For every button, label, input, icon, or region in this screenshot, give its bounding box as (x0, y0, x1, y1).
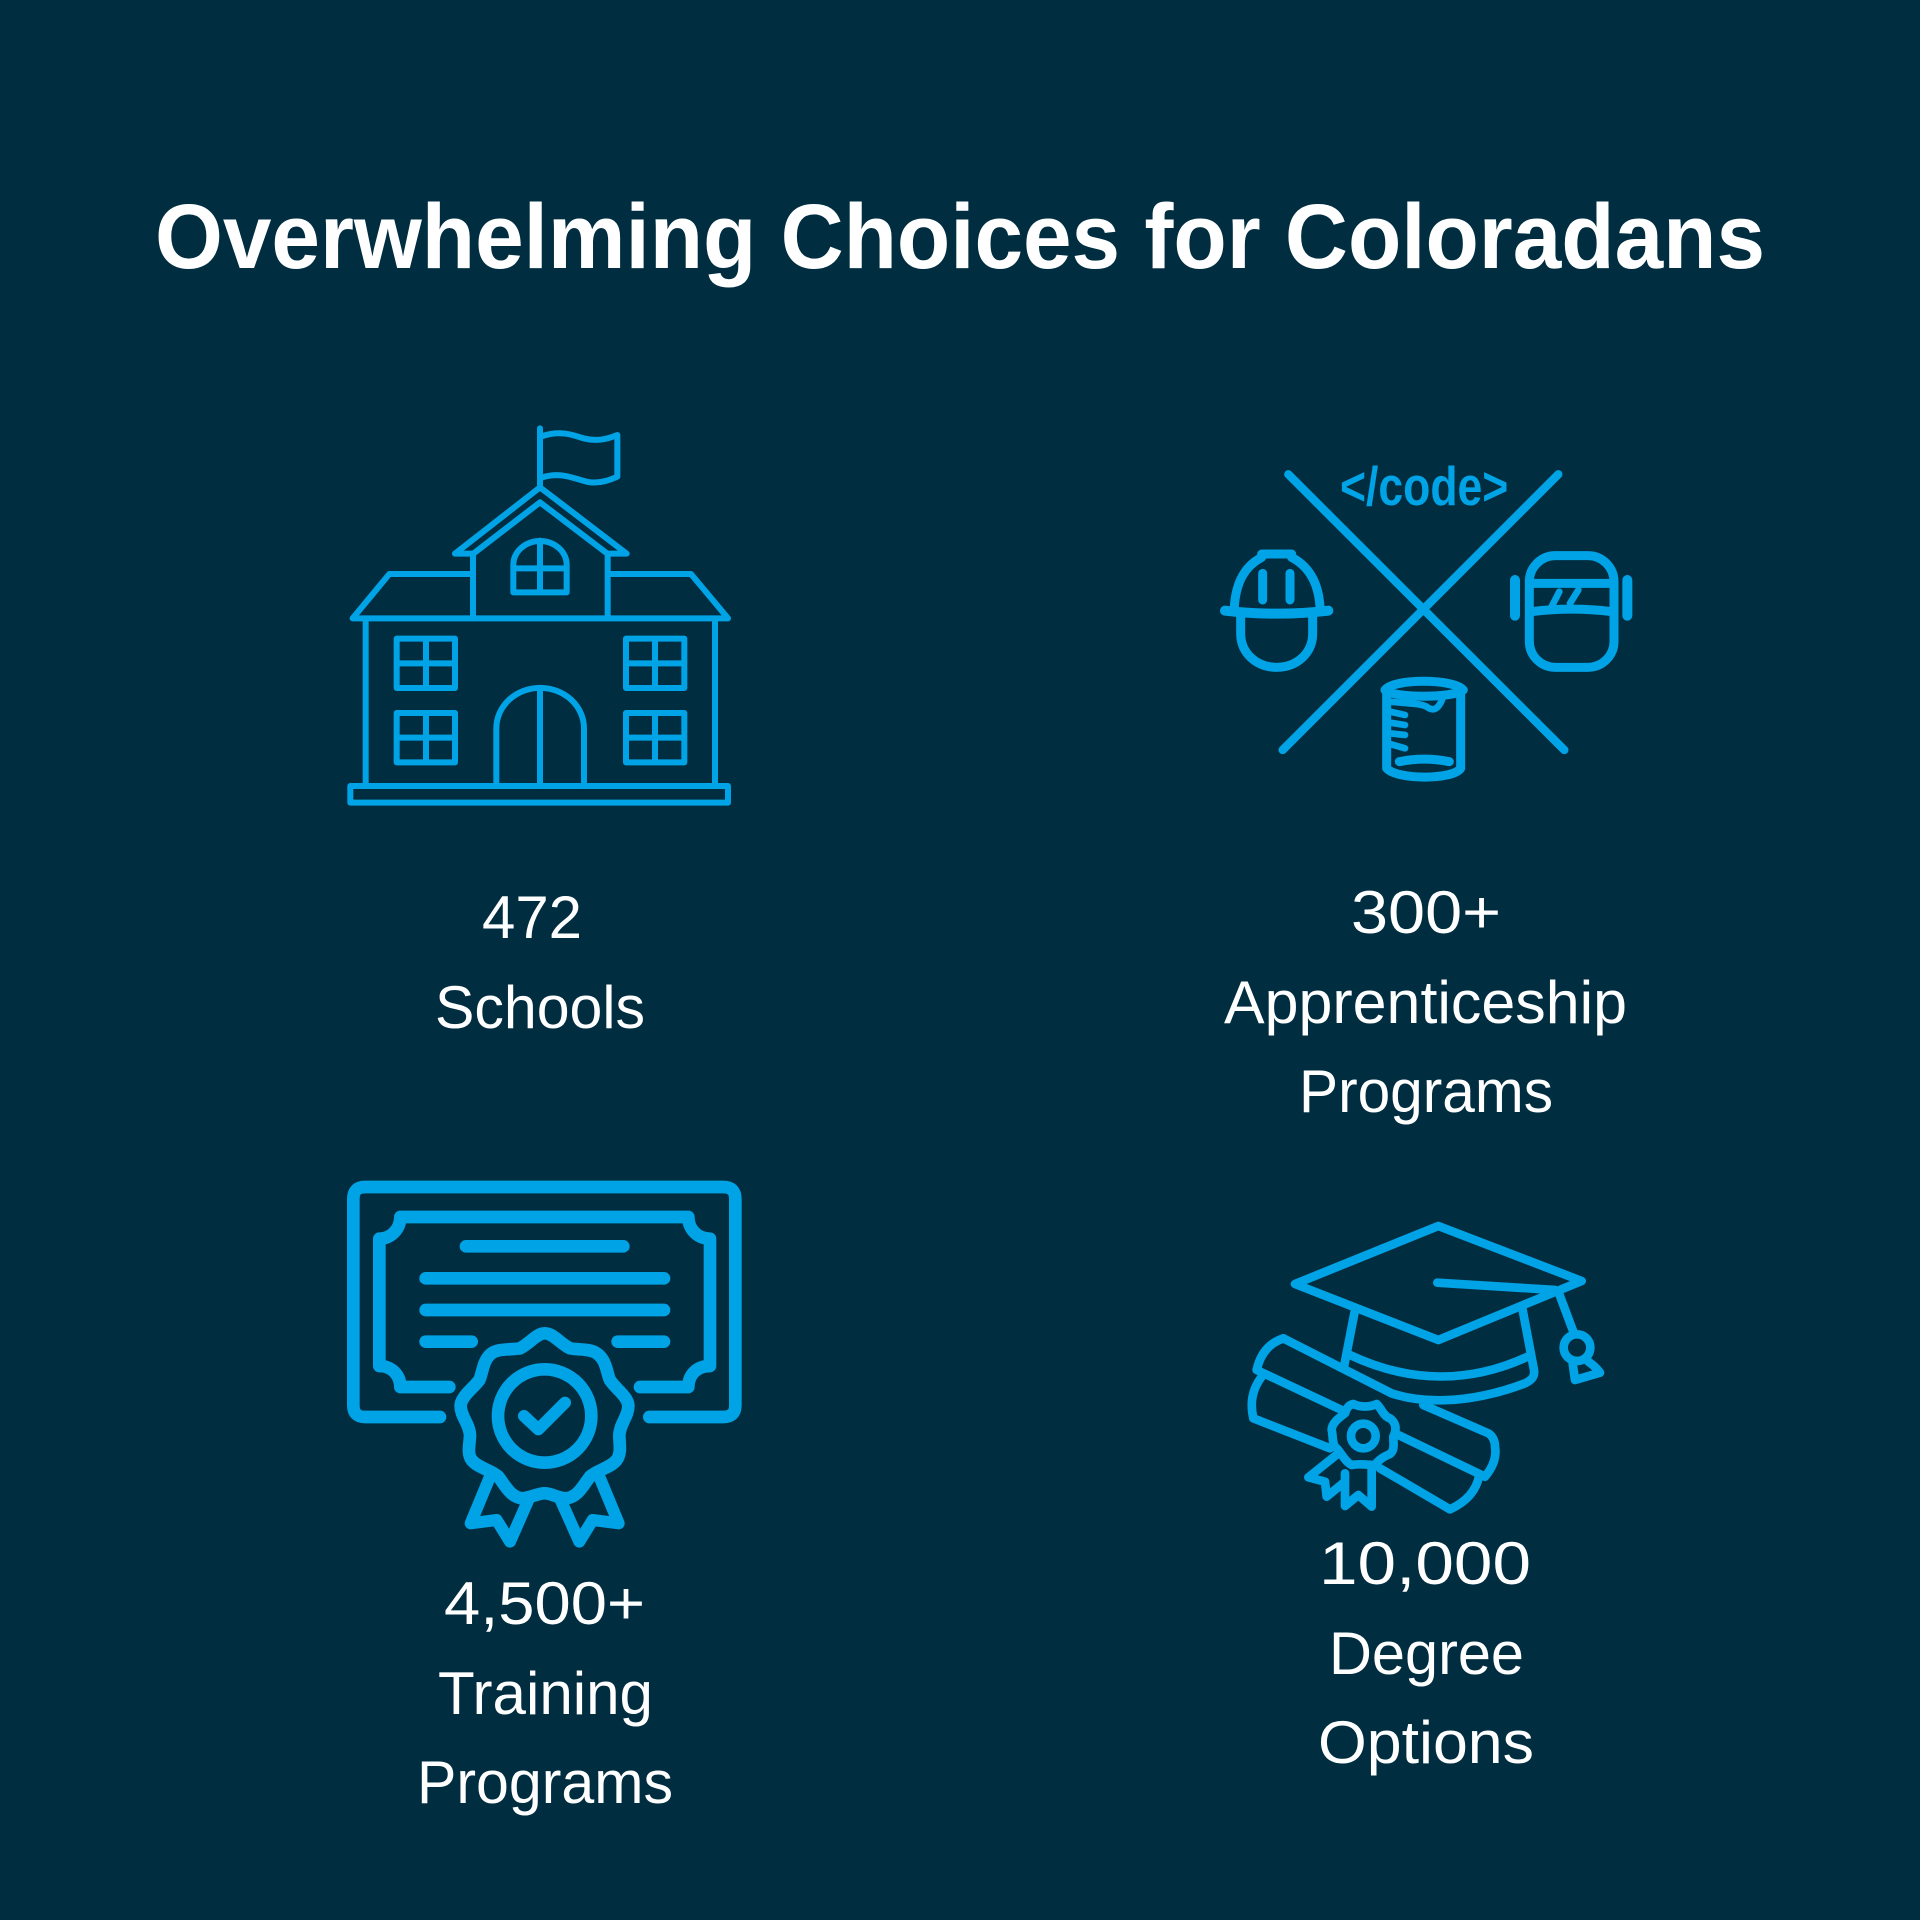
icon: welding mask (1515, 556, 1627, 667)
stat: 300+ apprenticeship programs: Apprenticeship (1224, 969, 1627, 1036)
icon: trades crossed lines (1225, 455, 1627, 777)
stat: 4,500+ training programs: Programs (417, 1749, 673, 1816)
stat: 300+ apprenticeship programs (1224, 879, 1627, 1125)
stat: 472 schools (435, 884, 645, 1041)
stat: 300+ apprenticeship programs: Programs (1299, 1058, 1553, 1125)
stat: 4,500+ training programs: 4,500+ (444, 1570, 645, 1637)
stat: 10,000 degree options (1318, 1530, 1534, 1776)
icon: graduation cap and diploma (1252, 1226, 1600, 1509)
icon: school building (350, 428, 728, 803)
stat: 300+ apprenticeship programs: 300+ (1351, 879, 1501, 946)
stat: 4,500+ training programs (417, 1570, 673, 1816)
icon: beaker (1385, 681, 1463, 777)
stat: 10,000 degree options: Options (1318, 1709, 1534, 1776)
stat: 472 schools: Schools (435, 974, 645, 1041)
stat: 472 schools: 472 (482, 884, 582, 951)
icon: certificate with rosette (353, 1187, 735, 1542)
icon: hard hat (1225, 554, 1328, 667)
stat: 10,000 degree options: Degree (1329, 1620, 1524, 1687)
stat: 10,000 degree options: 10,000 (1319, 1530, 1531, 1597)
stat: 4,500+ training programs: Training (438, 1660, 653, 1727)
icon label: code: </code> (1340, 455, 1508, 517)
title: Overwhelming Choices for Coloradans (155, 186, 1765, 288)
